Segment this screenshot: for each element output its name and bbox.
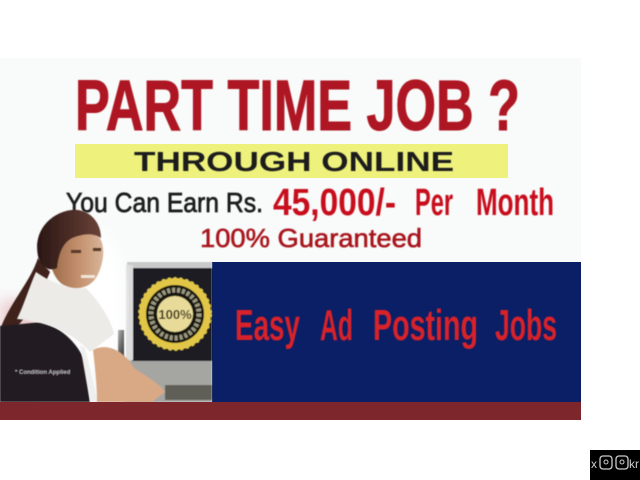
ponytail [1,258,50,328]
blouse [17,272,114,352]
panel heading: Posting [373,301,478,350]
watermark badge: x [591,457,597,471]
yellow banner: through online [75,144,508,178]
navy panel [212,262,581,402]
watermark badge [590,450,640,480]
maroon footer bar [0,402,581,420]
panel heading: Ad [320,301,353,350]
earnings line [66,182,554,224]
forearm and hands [93,347,165,402]
earnings line: 45,000/- [273,182,396,224]
chair [0,322,90,402]
watermark badge: kr [629,457,639,471]
hair [37,210,101,269]
earnings line: Per [415,182,453,224]
ad background [0,58,581,420]
neck and face [50,231,103,288]
earnings line: Month [476,182,554,224]
monitor [118,262,212,402]
eyes and smile [71,248,101,278]
footnote: * Condition Applied [15,370,71,376]
guarantee seal icon: 100% [158,307,192,322]
panel heading [235,301,557,350]
panel heading: Jobs [495,301,557,350]
yellow banner: through online: THROUGH ONLINE [134,146,454,177]
guarantee line: 100% Guaranteed [200,223,422,253]
panel heading: Easy [235,301,300,350]
guarantee seal icon [139,278,211,350]
earnings line: You Can Earn Rs. [66,187,263,218]
woman photo [0,210,165,402]
lower shirt [80,346,96,402]
